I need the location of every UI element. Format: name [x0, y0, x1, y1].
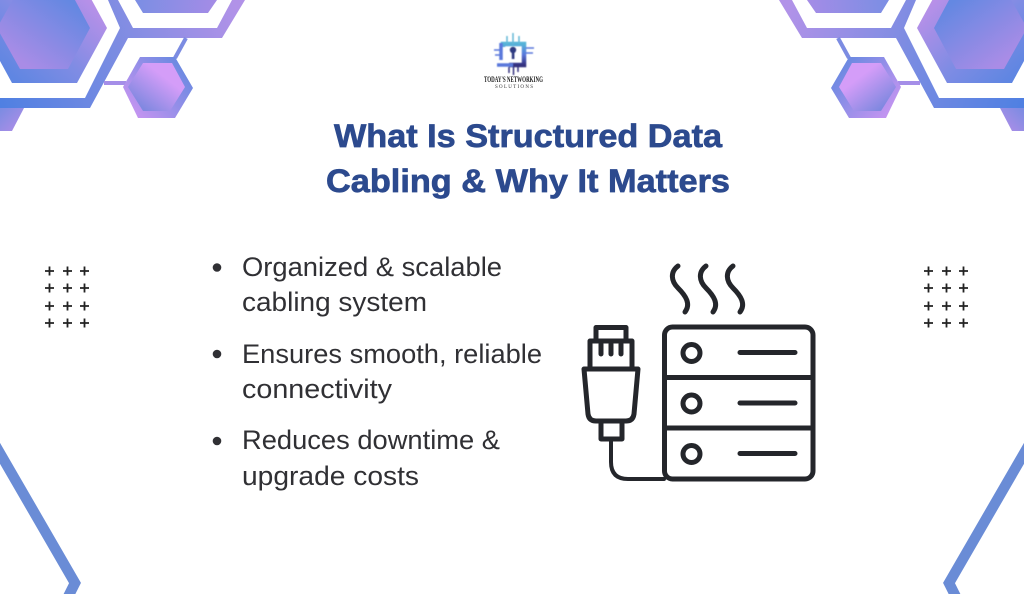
- title: [326, 118, 730, 199]
- bullet 3: [213, 425, 500, 491]
- bullet 1: [213, 252, 502, 317]
- decoration: bottom-left line: [0, 443, 75, 594]
- icon: server rack with network plug: [584, 266, 813, 479]
- decoration: top-left hexagons: [0, 0, 245, 131]
- bullet 2: connectivity: [242, 374, 393, 404]
- bullet 1: cabling system: [242, 287, 427, 317]
- plus pattern: left: [45, 266, 89, 328]
- decoration: top-right hexagons: [779, 0, 1024, 131]
- logo wordmark: TODAY'S NETWORKING: [484, 75, 543, 84]
- logo tagline: SOLUTIONS: [495, 85, 533, 90]
- bullet 2: Ensures smooth, reliable: [242, 339, 542, 369]
- bullet 3: upgrade costs: [242, 461, 419, 491]
- decoration: bottom-right line: [949, 443, 1024, 594]
- title line 1: What Is Structured Data: [334, 118, 722, 154]
- bullet 3: Reduces downtime &: [242, 425, 500, 455]
- icon: network plug: [584, 328, 664, 479]
- title line 2: Cabling & Why It Matters: [326, 163, 730, 199]
- icon: heat waves: [672, 266, 743, 312]
- logo: Today's Networking Solutions: [484, 33, 543, 90]
- bullet 1: Organized & scalable: [242, 252, 502, 282]
- bullet list: [213, 252, 542, 491]
- bullet 2: [213, 339, 542, 404]
- plus pattern: right: [924, 266, 968, 328]
- icon: server: [664, 327, 813, 479]
- logo icon: circuit keyhole: [494, 33, 534, 75]
